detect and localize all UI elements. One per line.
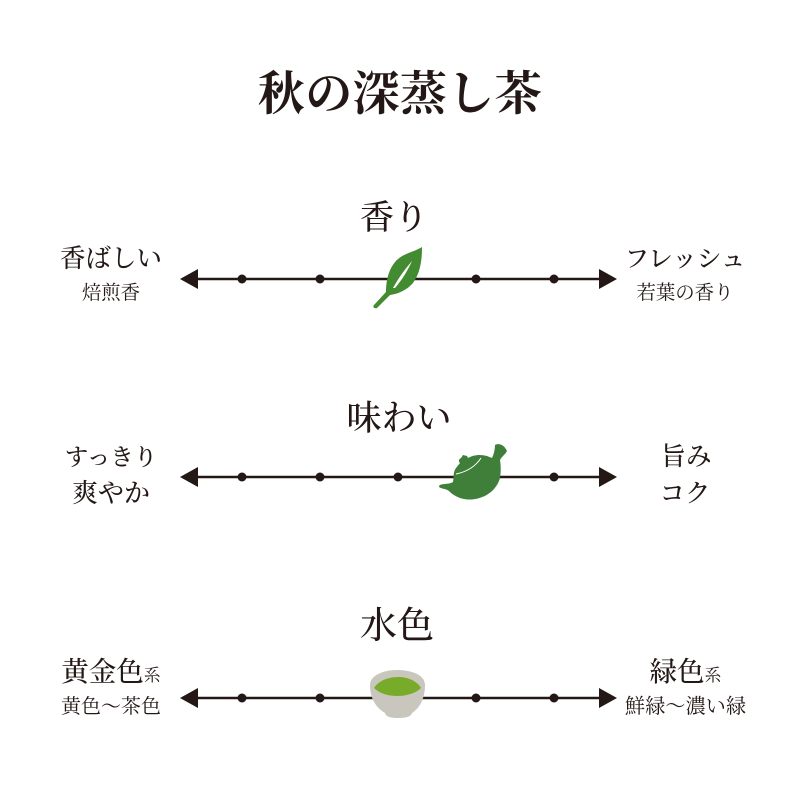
right label: aroma: 若葉の香り [637,282,733,304]
panel: liquor colour [61,605,746,718]
right label: colour: 緑色系 [650,656,722,687]
left label: taste: 爽やか [72,479,150,508]
left label: aroma: 焙煎香 [82,282,140,304]
panel: taste [65,399,712,508]
right label: aroma: フレッシュ [625,246,745,273]
right label: colour: 鮮緑～濃い緑 [625,695,746,718]
left label: aroma: 香ばしい [60,244,162,273]
axis: colour [180,688,617,708]
axis: taste [180,467,617,487]
right label: taste: コク [659,479,711,508]
icon: tea bowl [370,670,425,718]
icon: teapot [439,444,507,500]
right label: aroma [625,246,745,304]
left label: taste: すっきり [65,445,157,471]
left label: aroma [60,244,162,304]
heading: colour: 水色 [360,605,434,647]
left label: colour: 黄金色系 [61,656,161,687]
icon: tea leaf [373,247,422,308]
left label: colour: 黄色～茶色 [61,695,161,718]
axis: aroma [180,269,617,289]
panel: aroma [60,199,745,308]
heading: taste: 味わい [346,399,452,438]
left label: taste [65,445,157,508]
title: 秋の深蒸し茶 [258,69,542,121]
left label: colour [61,656,161,718]
heading: aroma: 香り [360,199,428,237]
right label: colour [625,656,746,718]
right label: taste [659,442,712,508]
right label: taste: 旨み [660,442,712,471]
